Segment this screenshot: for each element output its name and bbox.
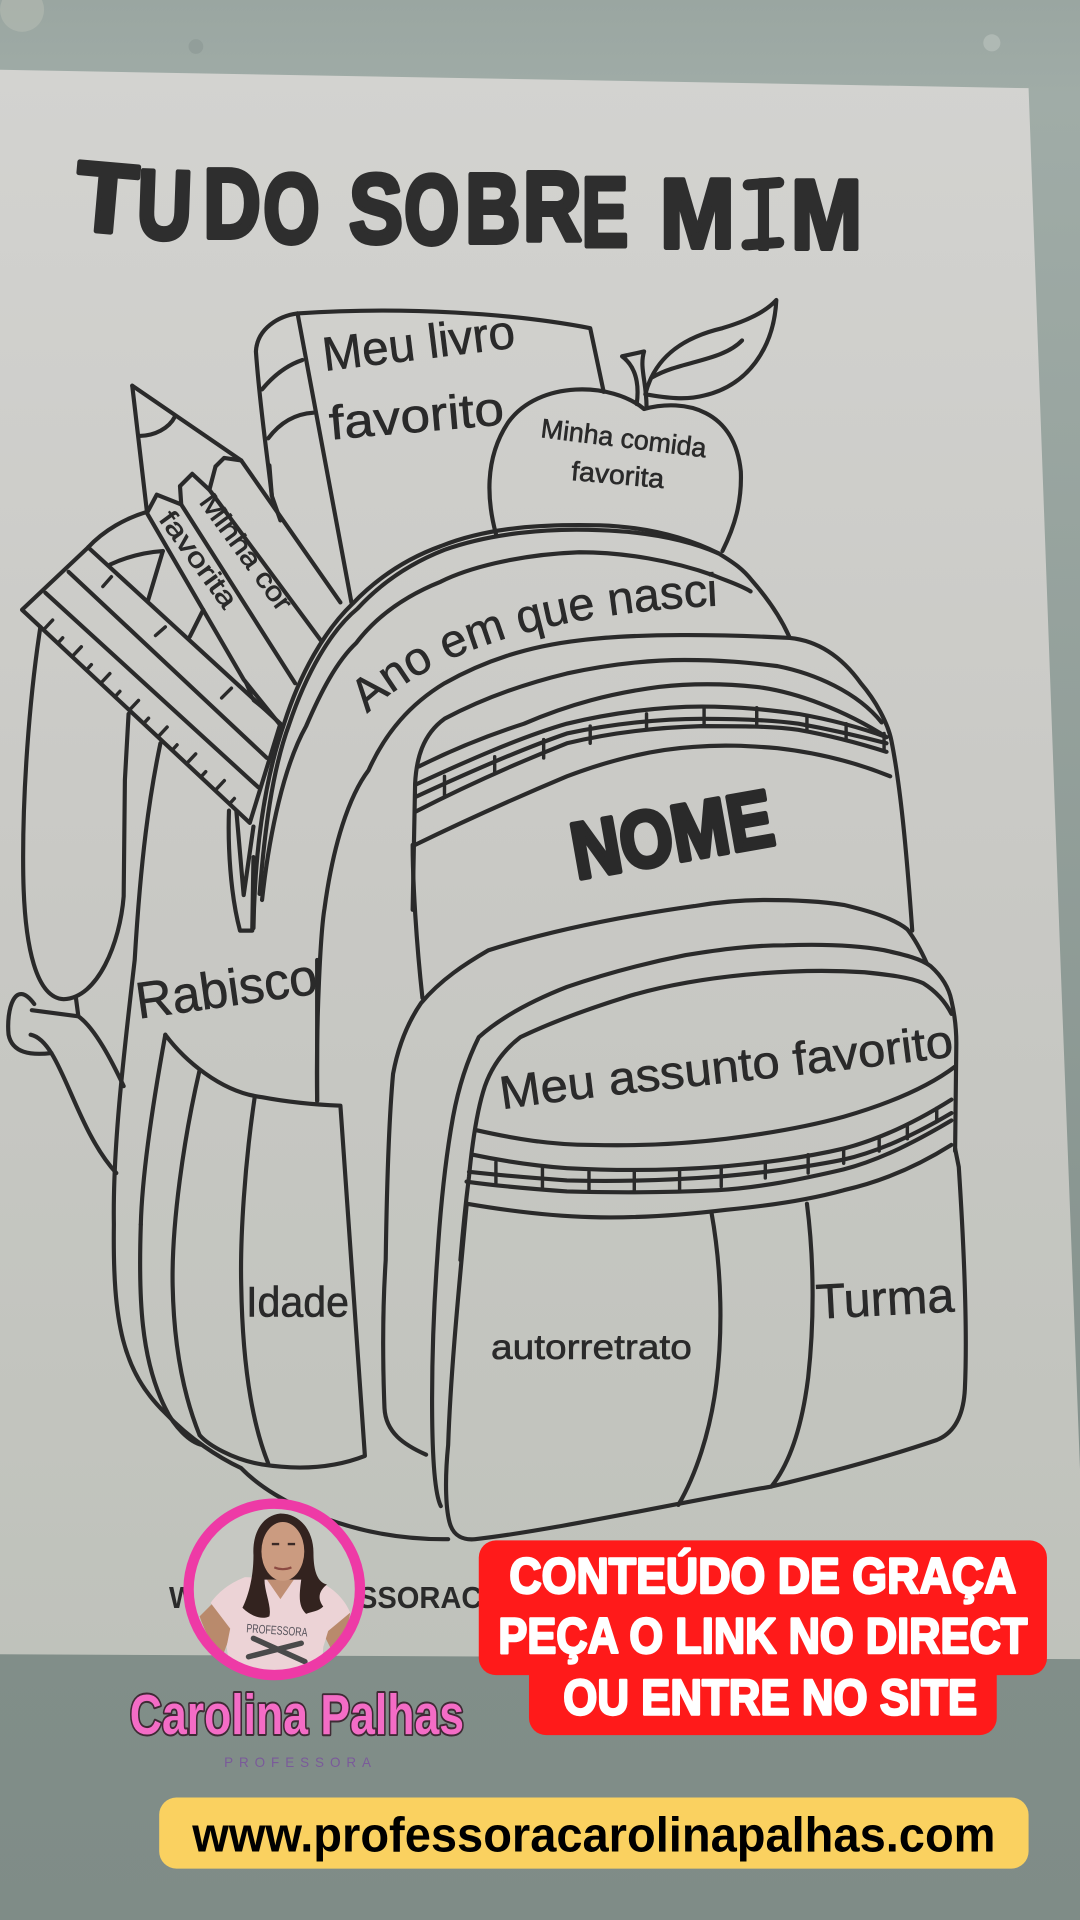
title: S [349,153,403,263]
title: R [523,151,582,261]
red callout: CONTEÚDO DE GRAÇA [509,1548,1016,1604]
title: I [756,160,771,270]
title: T [71,140,142,255]
name label: NOME [564,773,780,896]
title: O [404,155,459,265]
apple label: favorita [570,456,665,494]
website banner: www.professoracarolinapalhas.com [191,1808,996,1862]
book title text: favorito [327,382,506,451]
class label: Turma [814,1269,956,1330]
crayon label: favorita: favorita [153,505,244,614]
book [256,306,604,602]
avatar photo [189,1504,360,1684]
side pocket [141,1035,365,1467]
avatar photo: PROFESSORA [246,1621,309,1640]
year of birth label: Ano em que nasci [356,572,716,714]
title: D [203,149,261,259]
title: U [135,149,194,261]
title [71,140,862,270]
crayon label: minha cor: Minha cor [194,488,298,617]
red callout: OU ENTRE NO SITE [563,1669,977,1725]
title: B [465,153,520,263]
favourite subject label: Meu assunto favorito [501,1028,952,1109]
book title text [319,306,518,451]
doodle label: Rabisco [132,947,321,1030]
title: O [263,153,320,263]
apple label [539,413,708,494]
backpack left side [114,743,448,1539]
title: E [582,157,628,267]
printed site footer on paper: WWW.PROFESSORAC [169,1581,482,1615]
apple [489,300,776,551]
book title text: Meu livro [319,306,518,382]
title: M [791,160,862,270]
protractor behind ruler [88,512,203,637]
author name logo: Carolina Palhas [130,1683,464,1746]
self portrait label: autorretrato [491,1327,692,1367]
title: M [660,158,735,268]
pencils and crayons [132,386,340,724]
age label: Idade [246,1278,349,1326]
author name logo [130,1683,464,1770]
apple label: Minha comida [539,413,708,463]
backpack top arch [226,523,792,933]
ruler [22,547,280,823]
backpack straps [8,627,129,1173]
author name logo: PROFESSORA [224,1755,371,1770]
red callout [479,1540,1047,1735]
backpack main body [317,635,912,1101]
front pocket [381,898,968,1542]
